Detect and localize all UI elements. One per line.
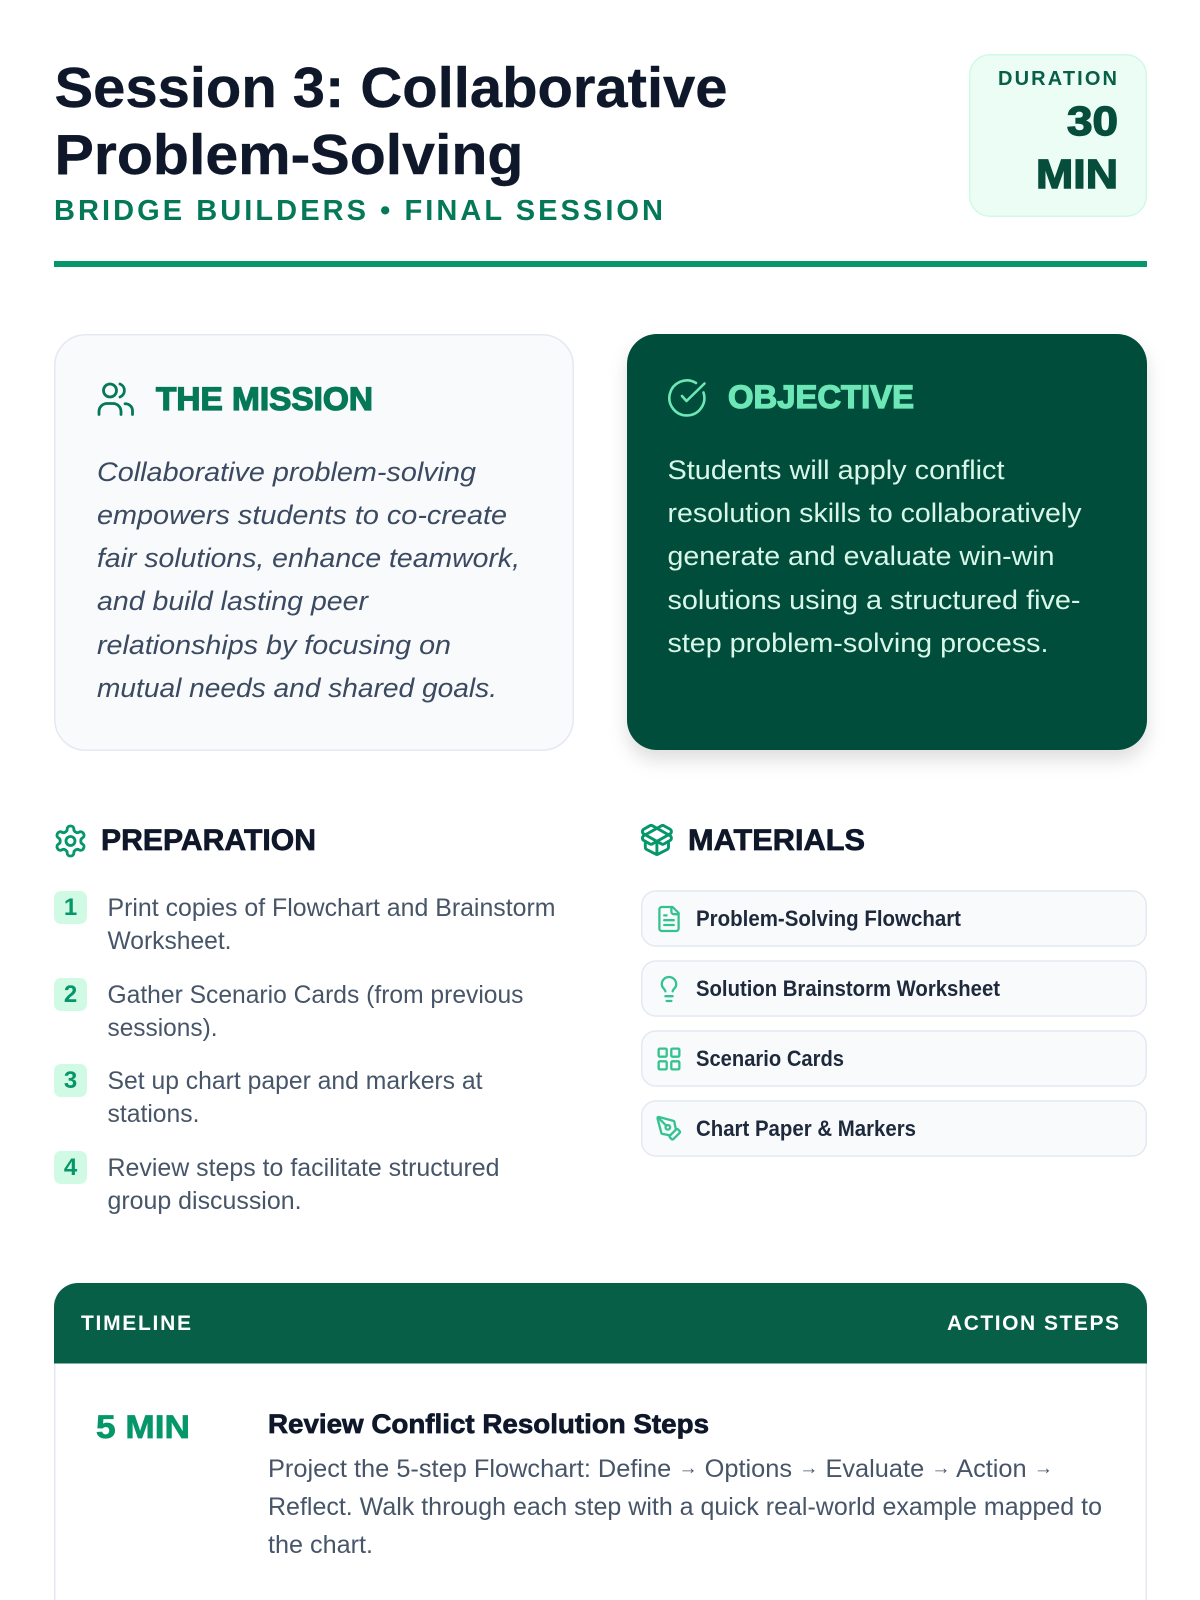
material: scenario cards: Scenario Cards (696, 1046, 844, 1071)
icon: users (99, 384, 133, 414)
table header: ACTION STEPS (947, 1312, 1119, 1335)
icon: gear (57, 826, 84, 856)
mission text: empowers students to co-create (97, 500, 507, 530)
mission heading: THE MISSION (156, 381, 373, 417)
objective text: step problem-solving process. (668, 628, 1048, 658)
step 2: Gather Scenario Cards (from previous (108, 981, 524, 1009)
mission text (97, 457, 520, 703)
row: 5 min: Evaluate (818, 1455, 931, 1483)
mission text: Collaborative problem-solving (97, 457, 476, 487)
panel: preparation (54, 824, 556, 1215)
title: Session 3: Collaborative (54, 56, 728, 120)
step 1: Print copies of Flowchart and Brainstorm (108, 894, 556, 922)
row: 5 min: → (931, 1458, 951, 1479)
step 1: Worksheet. (108, 927, 232, 955)
objective text: resolution skills to collaboratively (668, 498, 1082, 528)
objective text: generate and evaluate win-win (668, 541, 1054, 571)
material: chart paper (642, 1101, 1146, 1156)
material: scenario cards (642, 1031, 1146, 1086)
duration badge: DURATION (998, 68, 1117, 90)
row: 5 min: Action (951, 1455, 1034, 1483)
step 2 (54, 978, 524, 1042)
material: flowchart (642, 891, 1146, 946)
step 2: sessions). (108, 1014, 218, 1042)
step 2: 2 (64, 981, 77, 1008)
icon: grid (659, 1049, 679, 1069)
objective text: Students will apply conflict (668, 455, 1005, 485)
header (54, 55, 1147, 267)
panel: the mission (55, 335, 573, 750)
icon: lightbulb (662, 977, 676, 1001)
duration badge: MIN (1036, 151, 1118, 197)
row: 5 min: → (799, 1458, 818, 1479)
panel: materials (642, 824, 1146, 1156)
objective heading: OBJECTIVE (728, 379, 914, 415)
row: 5 min: the chart. (268, 1531, 373, 1559)
header rule (54, 261, 1147, 267)
row: 5 min: Reflect. Walk through each step with a quick real-world example mapped to (268, 1493, 1102, 1521)
row: 5 min: → (1034, 1458, 1053, 1479)
duration badge: 30 (1067, 98, 1118, 144)
material: chart paper: Chart Paper & Markers (696, 1116, 916, 1141)
duration badge (970, 55, 1146, 216)
row: 5 min: Review Conflict Resolution Steps (268, 1409, 709, 1439)
icon: pen (658, 1117, 680, 1140)
subtitle: BRIDGE BUILDERS • FINAL SESSION (54, 195, 663, 227)
preparation heading: PREPARATION (101, 824, 316, 857)
row: 5 min: 5 MIN (96, 1409, 190, 1445)
title: Problem-Solving (54, 123, 524, 187)
icon: check circle (669, 380, 704, 415)
title (54, 56, 728, 187)
material: worksheet (642, 961, 1146, 1016)
objective text: solutions using a structured five- (668, 585, 1080, 615)
step 3 (54, 1064, 483, 1128)
step 1: 1 (64, 894, 77, 921)
step 4 (54, 1151, 500, 1215)
material: flowchart: Problem-Solving Flowchart (696, 906, 962, 931)
row: 5 min: → (678, 1458, 698, 1479)
row: 5 min: Options (698, 1455, 799, 1483)
step 3: stations. (108, 1100, 200, 1128)
mission text: and build lasting peer (97, 586, 369, 616)
step 3: Set up chart paper and markers at (108, 1067, 483, 1095)
table header: TIMELINE (81, 1312, 191, 1335)
step 3: 3 (64, 1067, 77, 1094)
material: worksheet: Solution Brainstorm Worksheet (696, 976, 1001, 1001)
icon: open box (642, 825, 671, 854)
step 4: group discussion. (108, 1187, 302, 1215)
mission text: fair solutions, enhance teamwork, (97, 543, 520, 573)
mission text: relationships by focusing on (97, 630, 451, 660)
step 4: Review steps to facilitate structured (108, 1154, 500, 1182)
icon: document (659, 907, 679, 931)
panel: timeline table (54, 1283, 1147, 1600)
materials heading: MATERIALS (688, 824, 865, 857)
mission text: mutual needs and shared goals. (97, 673, 497, 703)
panel: objective (627, 334, 1147, 750)
step 1 (54, 891, 556, 955)
objective text (668, 455, 1082, 658)
row: 5 min (96, 1409, 1102, 1559)
step 4: 4 (64, 1154, 78, 1181)
table header (54, 1283, 1147, 1364)
row: 5 min: Project the 5-step Flowchart: Define (268, 1455, 665, 1483)
